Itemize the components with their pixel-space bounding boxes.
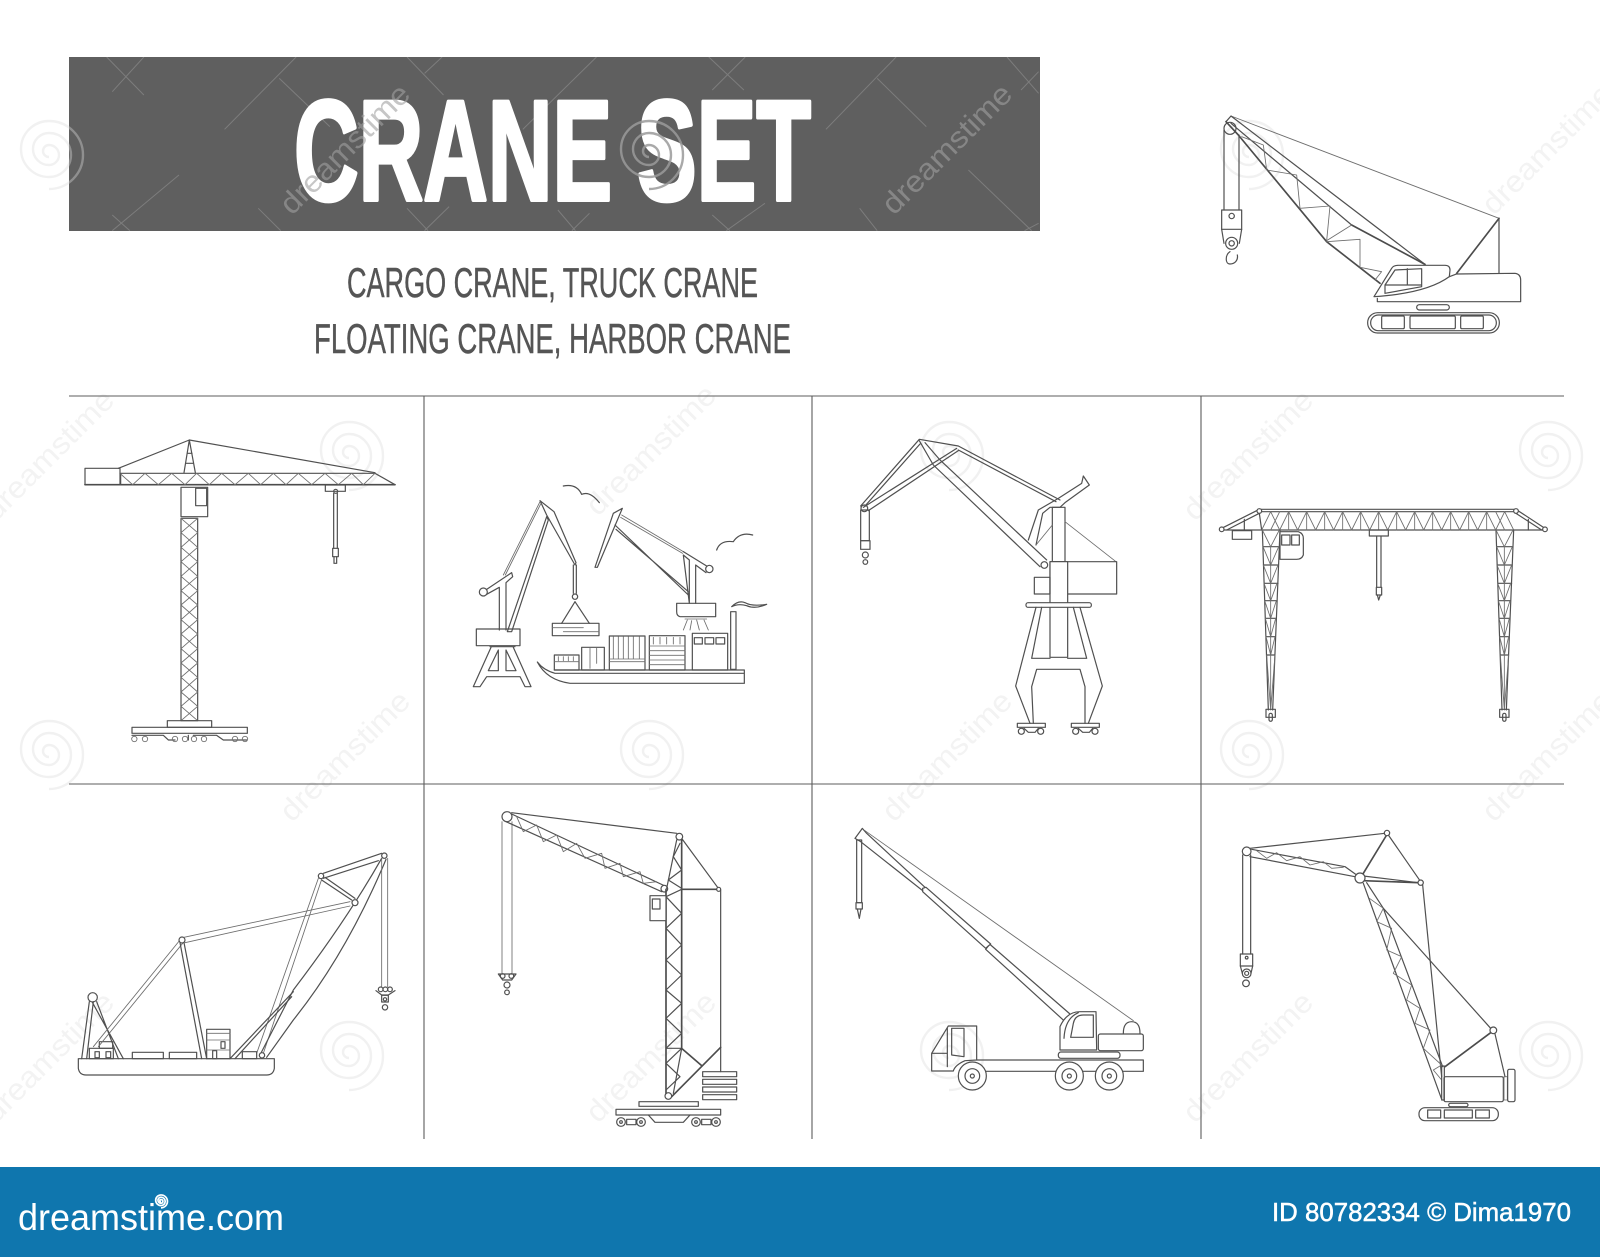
tower crane	[85, 440, 395, 742]
birds	[563, 485, 753, 550]
right harbor crane	[595, 508, 716, 630]
watermark layer: dreamstime	[580, 986, 723, 1129]
footer bar	[0, 1167, 1600, 1257]
truck crane	[855, 828, 1143, 1090]
right leg	[1496, 530, 1514, 721]
title banner	[21, 57, 1040, 231]
harbor scene with ship	[473, 485, 767, 687]
crawler crane top right	[1222, 116, 1521, 333]
portal harbor crane	[861, 439, 1117, 734]
grid lines	[69, 396, 1564, 1139]
title banner: dreamstime	[274, 78, 417, 221]
watermark layer: dreamstime	[1177, 384, 1320, 527]
left leg	[1262, 530, 1280, 721]
left harbor crane	[473, 501, 599, 687]
subtitle: CARGO CRANE, TRUCK CRANE	[347, 259, 758, 306]
footer credit: ID 80782334 © Dima1970	[1272, 1197, 1571, 1227]
cargo ship	[537, 602, 767, 683]
watermark layer: dreamstime	[876, 685, 1019, 828]
title text: CRANE SET	[294, 72, 811, 231]
watermark layer: dreamstime	[1177, 986, 1320, 1129]
watermark layer: dreamstime	[580, 379, 723, 522]
subtitle: FLOATING CRANE, HARBOR CRANE	[314, 315, 791, 362]
luffing crane on rail bogies	[498, 812, 737, 1126]
gantry crane	[1219, 509, 1547, 721]
watermark layer: dreamstime	[274, 685, 417, 828]
crawler lattice crane	[1240, 830, 1515, 1121]
title banner: dreamstime	[876, 78, 1019, 221]
subtitle	[314, 259, 791, 362]
footer logo: dreamstime.com	[18, 1197, 284, 1238]
floating crane	[78, 853, 395, 1075]
